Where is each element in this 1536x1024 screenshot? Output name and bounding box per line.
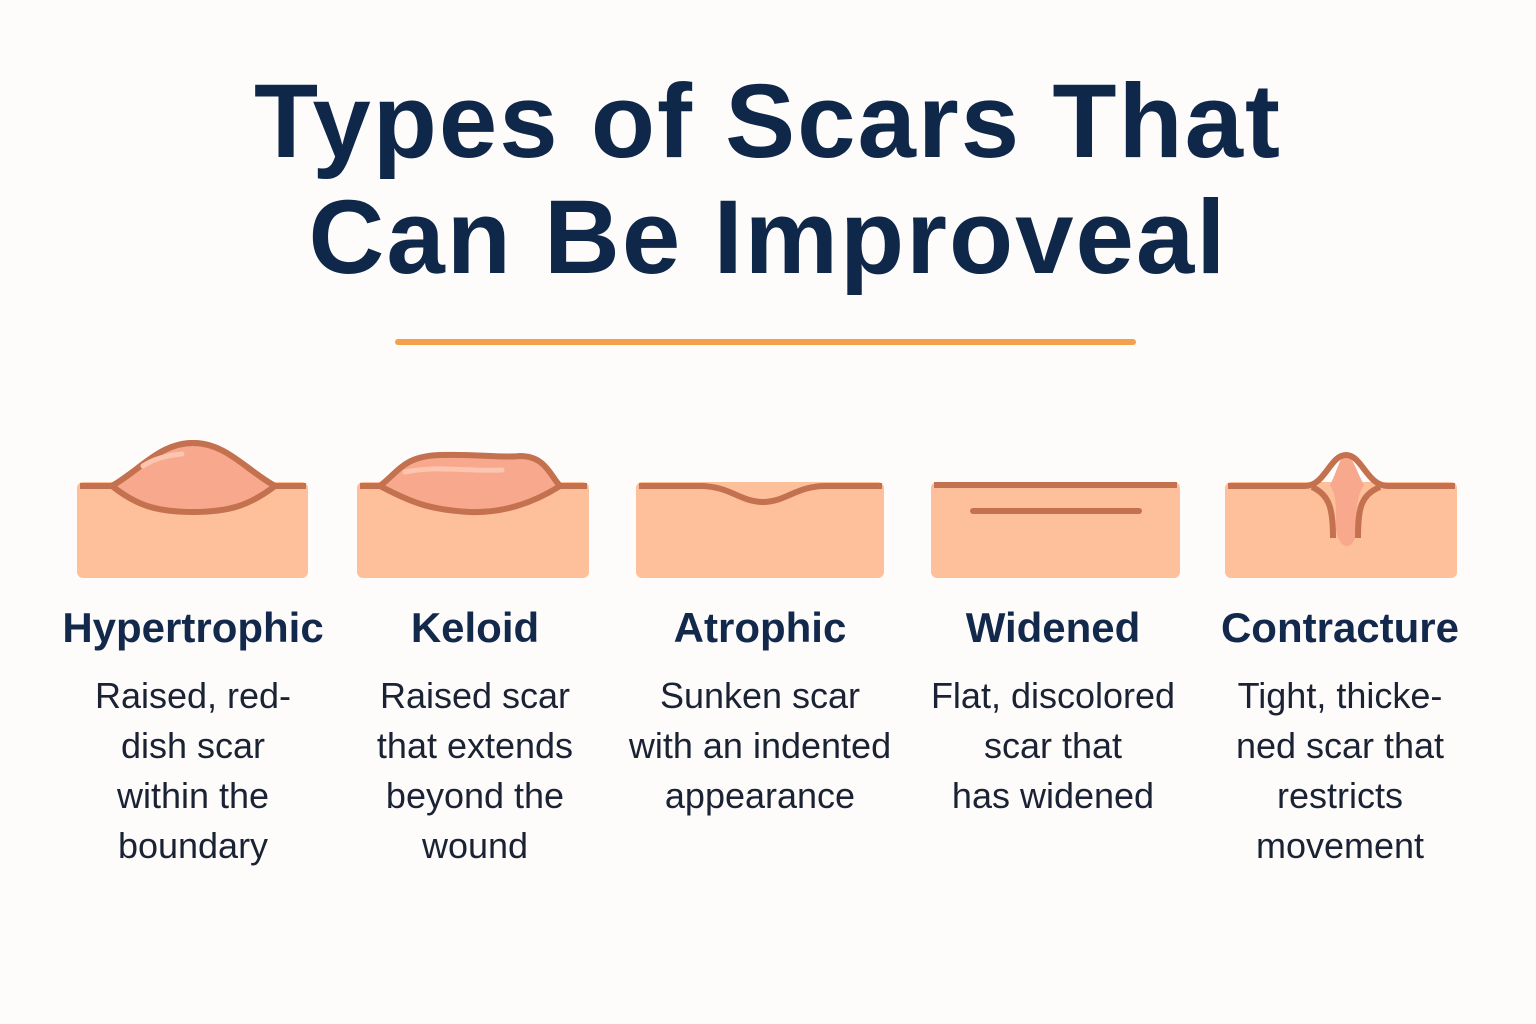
- title: [254, 63, 1282, 296]
- column: atrophic: Sunken scar: [660, 675, 860, 716]
- column: keloid: that extends: [377, 725, 573, 766]
- column: hypertrophic: [62, 604, 324, 866]
- column: hypertrophic: Raised, red-: [95, 675, 291, 716]
- icon: keloid: [357, 455, 589, 578]
- column: contracture: Contracture: [1221, 604, 1459, 651]
- icon: contracture: [1225, 455, 1457, 578]
- column: hypertrophic: boundary: [118, 825, 268, 866]
- icon: widened: [931, 482, 1180, 578]
- column: hypertrophic: within the: [117, 775, 269, 816]
- column: hypertrophic: Hypertrophic: [62, 604, 324, 651]
- column: contracture: ned scar that: [1236, 725, 1444, 766]
- column: keloid: beyond the: [386, 775, 564, 816]
- column: atrophic: appearance: [665, 775, 855, 816]
- column: widened: Flat, discolored: [931, 675, 1175, 716]
- title: Can Be Improveal: [309, 179, 1227, 296]
- column: hypertrophic: dish scar: [121, 725, 265, 766]
- column: contracture: movement: [1256, 825, 1424, 866]
- title: Types of Scars That: [254, 63, 1282, 180]
- column: widened: [931, 604, 1175, 816]
- column: widened: has widened: [952, 775, 1154, 816]
- column: contracture: [1221, 604, 1459, 866]
- column: atrophic: Atrophic: [674, 604, 846, 651]
- column: contracture: Tight, thicke-: [1238, 675, 1442, 716]
- column: keloid: Keloid: [411, 604, 539, 651]
- accent underline: [395, 339, 1136, 345]
- icon: atrophic: [636, 482, 884, 578]
- column: keloid: Raised scar: [380, 675, 570, 716]
- icon: hypertrophic: [77, 443, 308, 578]
- column: keloid: [377, 604, 573, 866]
- column: contracture: restricts: [1277, 775, 1403, 816]
- column: widened: scar that: [984, 725, 1122, 766]
- column: atrophic: with an indented: [629, 725, 891, 766]
- column: keloid: wound: [422, 825, 528, 866]
- column: widened: Widened: [966, 604, 1140, 651]
- column: atrophic: [628, 604, 891, 816]
